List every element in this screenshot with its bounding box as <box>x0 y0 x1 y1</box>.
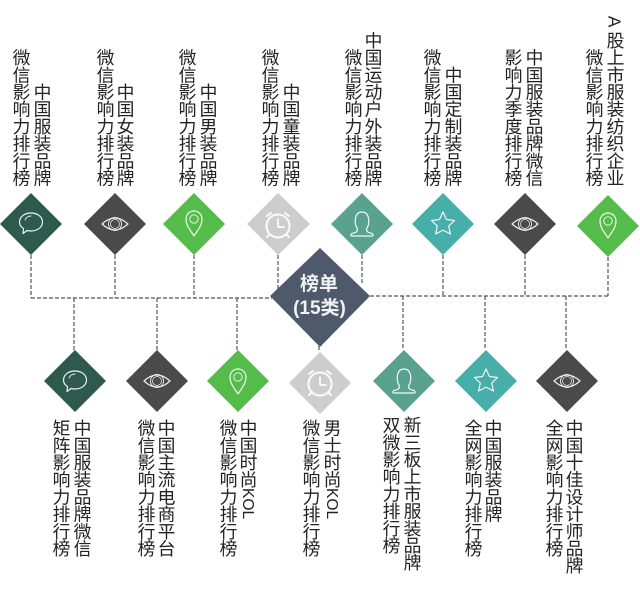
top item 4: 中国童装品牌 <box>247 48 310 255</box>
bottom item 7: 中国十佳设计师品牌: 中国十佳设计师品牌 <box>564 419 584 574</box>
top item 1: 中国服装品牌: 中国服装品牌 <box>32 83 52 186</box>
top item 5: 中国运动户外装品牌 <box>331 31 393 255</box>
top item 4: 中国童装品牌: 微信影响力排行榜 <box>260 48 280 187</box>
top item 8: A股上市服装纺织企业: A 股上市服装纺织企业 <box>604 16 624 186</box>
top item 2: 中国女装品牌: 中国女装品牌 <box>114 83 134 186</box>
bottom item 6: 中国服装品牌全网: 全网影响力排行榜 <box>462 419 482 558</box>
bottom item 5: 新三板上市服装品牌: 新三板上市服装品牌 <box>402 416 422 571</box>
bottom item 5: 新三板上市服装品牌 <box>373 350 435 571</box>
bottom item 6: 中国服装品牌全网: 中国服装品牌 <box>482 419 502 523</box>
top item 6: 中国定制装品牌 <box>412 48 474 255</box>
central diamond: 榜单(15类) <box>270 248 370 347</box>
bottom item 4: 男士时尚KOL <box>289 352 351 558</box>
bottom item 7: 中国十佳设计师品牌: 全网影响力排行榜 <box>544 419 564 558</box>
top item 7: 中国服装品牌微信影响力季度排行榜: 中国服装品牌微信 <box>524 48 544 186</box>
top item 8: A股上市服装纺织企业: 微信影响力排行榜 <box>584 48 604 187</box>
top item 1: 中国服装品牌: 微信影响力排行榜 <box>10 48 30 187</box>
top item 2: 中国女装品牌 <box>84 48 146 255</box>
central diamond: 榜单(15类): (15类) <box>293 297 346 319</box>
bottom item 3: 中国时尚KOL: 中国时尚 KOL <box>238 419 258 519</box>
top item 7: 中国服装品牌微信影响力季度排行榜: 影响力季度排行榜 <box>502 48 522 187</box>
bottom item 4: 男士时尚KOL: 微信影响力排行榜 <box>300 419 320 558</box>
bottom item 2: 中国主流电商平台: 微信影响力排行榜 <box>136 419 156 558</box>
bottom item 2: 中国主流电商平台: 中国主流电商平台 <box>156 419 176 557</box>
top item 4: 中国童装品牌: 中国童装品牌 <box>280 83 300 186</box>
top item 8: A股上市服装纺织企业 <box>577 16 639 257</box>
bottom item 5: 新三板上市服装品牌: 双微影响力排行榜 <box>380 416 400 555</box>
bottom item 6: 中国服装品牌全网 <box>455 350 517 558</box>
bottom item 2: 中国主流电商平台 <box>126 350 188 558</box>
top item 3: 中国男装品牌: 中国男装品牌 <box>198 83 218 186</box>
bottom item 3: 中国时尚KOL: 微信影响力排行榜 <box>218 419 238 558</box>
bottom item 1: 中国服装品牌微信矩阵: 中国服装品牌微信 <box>72 419 92 557</box>
central diamond: 榜单(15类): 榜单 <box>300 273 338 295</box>
top item 7: 中国服装品牌微信影响力季度排行榜 <box>494 48 556 255</box>
bottom item 1: 中国服装品牌微信矩阵 <box>44 350 106 558</box>
top item 5: 中国运动户外装品牌: 中国运动户外装品牌 <box>362 31 382 186</box>
top item 3: 中国男装品牌: 微信影响力排行榜 <box>176 48 196 187</box>
top item 6: 中国定制装品牌: 中国定制装品牌 <box>442 65 462 186</box>
top item 3: 中国男装品牌 <box>163 48 225 255</box>
bottom item 4: 男士时尚KOL: 男士时尚 KOL <box>322 419 342 519</box>
top item 5: 中国运动户外装品牌: 微信影响力排行榜 <box>342 48 362 187</box>
bottom item 3: 中国时尚KOL <box>207 350 269 558</box>
top item 1: 中国服装品牌 <box>0 48 62 255</box>
top item 6: 中国定制装品牌: 微信影响力排行榜 <box>422 48 442 187</box>
bottom item 7: 中国十佳设计师品牌 <box>536 350 598 574</box>
dashed connector lines <box>31 255 608 352</box>
top item 2: 中国女装品牌: 微信影响力排行榜 <box>94 48 114 187</box>
bottom item 1: 中国服装品牌微信矩阵: 矩阵影响力排行榜 <box>50 419 70 558</box>
